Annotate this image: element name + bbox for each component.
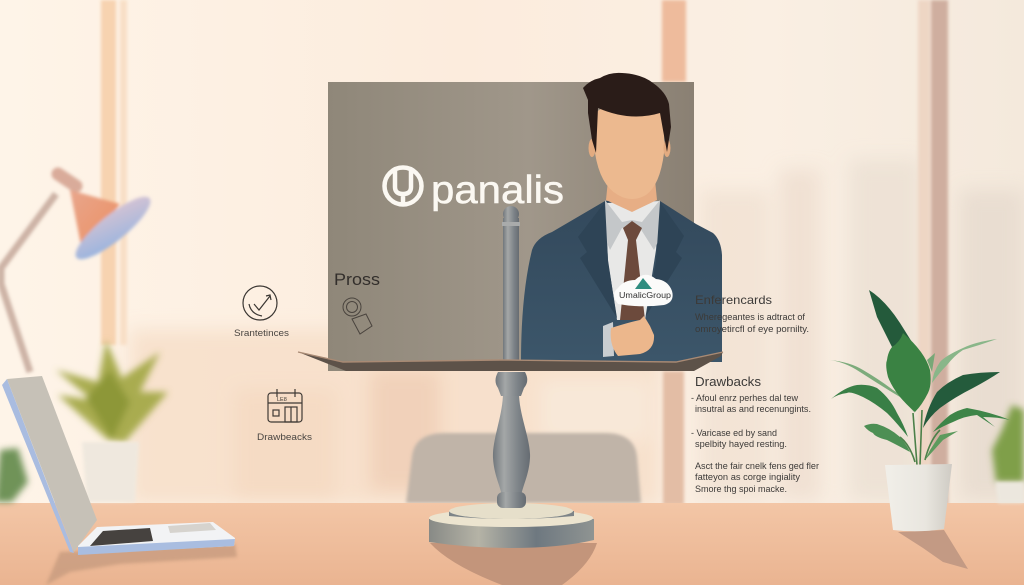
text block: Drawbacks: Drawbacks (695, 375, 761, 389)
stems (900, 410, 940, 465)
label: Drawbeacks: Drawbeacks (257, 432, 312, 443)
base upper disc (449, 511, 574, 519)
icon: ribbon (343, 298, 372, 334)
neck (606, 180, 657, 212)
text block: Drawbacks: Smore thg spoi macke. (695, 484, 787, 494)
cloud badge: UmalicGroup (619, 291, 672, 300)
text block: Enferencards: omroyetircfl of eye pornilty. (695, 324, 809, 334)
blurred office chair (406, 433, 641, 503)
cuff (603, 322, 614, 357)
blurred desk lamp (1, 174, 158, 372)
face (595, 101, 664, 199)
pedestal shadow (430, 543, 597, 585)
base lower disc (429, 519, 594, 548)
text block: Enferencards: Enferencards (695, 293, 772, 307)
text block: Drawbacks: fatteyon as corge ingiality (695, 472, 801, 482)
laptop (2, 376, 237, 585)
text block: Drawbacks (691, 375, 819, 494)
suit jacket (521, 201, 722, 362)
blurred plant on right (992, 405, 1024, 503)
pot shadow (898, 530, 968, 569)
lapels (578, 202, 617, 318)
text block: Drawbacks: - Varicase ed by sand (691, 428, 777, 438)
wordmark: panalis (431, 169, 564, 212)
shirt (605, 201, 660, 320)
text block: Drawbacks: - Afoul enrz perhes dal tew (691, 393, 798, 403)
text block: Enferencards (695, 293, 809, 334)
blurred plant on left (56, 340, 168, 502)
shirt collar (605, 200, 660, 250)
heading: Pross: Pross (334, 270, 380, 289)
display panel (328, 82, 694, 371)
cloud badge (614, 275, 673, 306)
shelf ledge (298, 352, 723, 371)
pole (502, 206, 520, 363)
text block: Drawbacks: insutral as and recenungints. (695, 404, 811, 414)
potted plant (830, 290, 1010, 569)
icon: calendar building: LE8 (277, 397, 287, 403)
tie (620, 221, 645, 320)
pot (885, 464, 952, 531)
logo mark (384, 168, 422, 204)
logo: panalis (384, 168, 564, 212)
blurred plant far left (0, 448, 28, 502)
text block: Drawbacks: spelbity hayed resting. (695, 439, 787, 449)
fist (611, 316, 654, 356)
hair (583, 73, 671, 153)
text block: Drawbacks: Asct the fair cnelk fens ged fler (695, 461, 819, 471)
table top (0, 503, 1024, 585)
text block: Enferencards: Wheregeantes is adtract of (695, 312, 806, 322)
icon: calendar building (268, 389, 302, 422)
label: Srantetinces: Srantetinces (234, 328, 289, 339)
leaves (869, 290, 915, 347)
icon: check badge (243, 286, 277, 320)
baluster (493, 393, 530, 496)
presenter figure (521, 73, 722, 362)
pedestal stand (429, 372, 597, 585)
